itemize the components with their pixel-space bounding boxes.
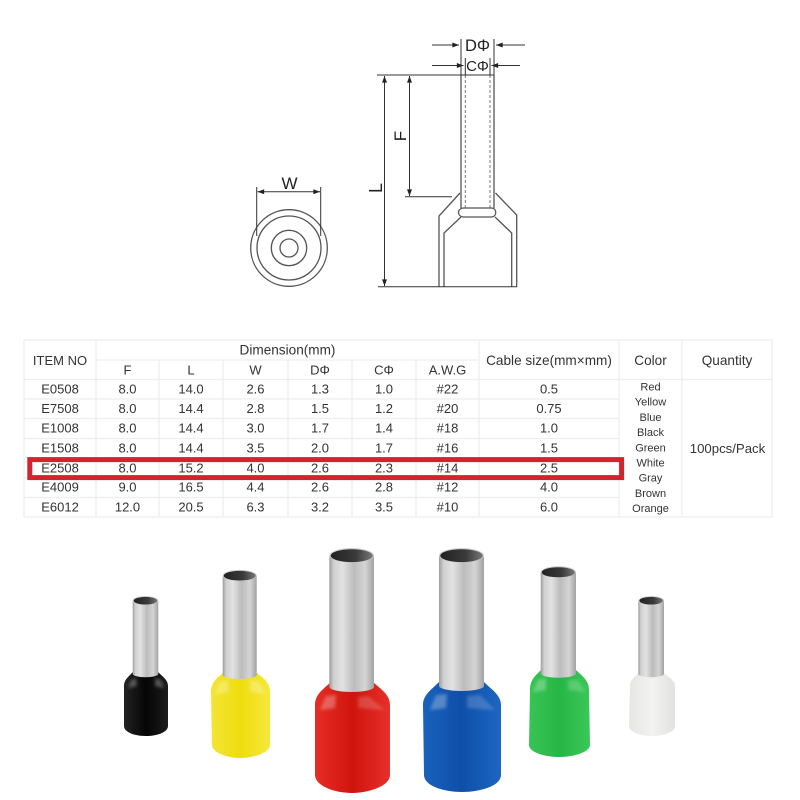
row E1008: 1.0 <box>540 420 558 436</box>
ferrule: red <box>315 548 390 793</box>
dimension: C phi <box>432 58 520 75</box>
side view: ferrule outline <box>439 75 517 287</box>
row E2508: #14 <box>437 460 458 476</box>
row E0508: 2.6 <box>246 382 265 396</box>
table header: A.W.G <box>429 362 466 378</box>
ferrule: black <box>124 596 168 736</box>
row E4009: 4.4 <box>246 480 265 494</box>
color list: Yellow <box>635 396 666 408</box>
row E0508: 1.0 <box>375 382 393 396</box>
color list: Orange <box>632 503 669 515</box>
table header: ITEM NO <box>33 353 87 368</box>
color list <box>632 382 669 515</box>
row E6012: 20.5 <box>178 500 204 514</box>
end view: ferrule circles with W dimension: W <box>281 174 298 193</box>
table header: Color <box>634 353 667 368</box>
row E2508: 8.0 <box>118 460 137 476</box>
row E4009: 2.8 <box>375 480 393 494</box>
row E1508: 8.0 <box>118 440 137 456</box>
row E4009: 4.0 <box>540 480 558 494</box>
row E1008: 1.7 <box>311 420 329 436</box>
row E1008: 1.4 <box>375 420 393 436</box>
row E7508: 1.5 <box>311 401 329 416</box>
color list: White <box>636 458 665 470</box>
row E0508: 0.5 <box>540 382 558 396</box>
row E4009: E4009 <box>41 480 79 494</box>
row E7508 <box>41 401 562 416</box>
dimension: L <box>366 75 517 287</box>
color list: Red <box>640 382 661 394</box>
row E0508: E0508 <box>41 382 79 396</box>
row E6012: #10 <box>437 500 458 514</box>
table grid <box>24 340 772 517</box>
row E6012: 6.3 <box>246 500 265 514</box>
row E1508: 1.5 <box>540 440 558 456</box>
row E1008 <box>41 420 558 436</box>
row E6012: E6012 <box>41 500 79 514</box>
quantity: 100pcs/Pack <box>690 441 766 456</box>
product photo: six ferrules <box>124 548 675 793</box>
table header: F <box>124 362 132 378</box>
row E7508: #20 <box>437 401 458 416</box>
row E1008: E1008 <box>41 420 79 436</box>
row E2508: E2508 <box>41 460 79 476</box>
row E2508: 2.3 <box>375 460 393 476</box>
row E1508: 3.5 <box>246 440 265 456</box>
row E6012: 3.5 <box>375 500 393 514</box>
row E1508: 1.7 <box>375 440 393 456</box>
row E2508 <box>41 460 558 476</box>
row E7508: 0.75 <box>536 401 562 416</box>
row E0508 <box>41 382 558 396</box>
color list: Brown <box>635 488 666 500</box>
color list: Blue <box>639 412 662 424</box>
row E6012: 12.0 <box>115 500 140 514</box>
row E1008: #18 <box>437 420 458 436</box>
table header: CΦ <box>374 362 394 378</box>
row E1508: 2.0 <box>311 440 329 456</box>
dimension: F <box>391 76 452 197</box>
row E6012 <box>41 500 558 514</box>
row E1508: E1508 <box>41 440 79 456</box>
row E2508: 2.5 <box>540 460 558 476</box>
row E4009: 16.5 <box>178 480 204 494</box>
dimension: D phi: DΦ <box>465 37 490 55</box>
row E0508: 1.3 <box>311 382 329 396</box>
row E1008: 14.4 <box>178 420 204 436</box>
row E1008: 8.0 <box>118 420 137 436</box>
row E7508: 14.4 <box>178 401 204 416</box>
end view: ferrule circles with W dimension <box>251 174 327 286</box>
table header: Quantity <box>702 353 753 368</box>
color list: Black <box>637 427 664 439</box>
dimension: L: L <box>366 183 386 193</box>
color list: Gray <box>639 472 663 484</box>
row E1008: 3.0 <box>246 420 265 436</box>
row E0508: #22 <box>437 382 458 396</box>
row E7508: E7508 <box>41 401 79 416</box>
table header: L <box>187 362 195 378</box>
row E6012: 3.2 <box>311 500 329 514</box>
red highlight box around E2508 row <box>30 460 622 478</box>
table header: Cable size(mm×mm) <box>486 353 612 368</box>
ferrule: white <box>629 596 675 736</box>
row E6012: 6.0 <box>540 500 558 514</box>
dimension: C phi: CΦ <box>466 58 489 75</box>
table header: W <box>249 362 262 378</box>
ferrule: blue <box>423 548 501 792</box>
row E4009: 9.0 <box>118 480 137 494</box>
color list: Green <box>635 442 666 454</box>
row E4009: #12 <box>437 480 458 494</box>
row E4009 <box>41 480 558 494</box>
dimension: D phi <box>432 37 525 75</box>
row E7508: 2.8 <box>246 401 265 416</box>
dimension: F: F <box>391 131 410 141</box>
row E1508: #16 <box>437 440 458 456</box>
table header: DΦ <box>310 362 330 378</box>
row E1508 <box>41 440 558 456</box>
ferrule: yellow <box>211 570 270 758</box>
row E4009: 2.6 <box>311 480 329 494</box>
technical drawing <box>251 37 525 287</box>
row E7508: 1.2 <box>375 401 393 416</box>
row E7508: 8.0 <box>118 401 137 416</box>
row E2508: 15.2 <box>178 460 204 476</box>
row E1508: 14.4 <box>178 440 204 456</box>
ferrule: green <box>529 566 590 757</box>
row E2508: 2.6 <box>311 460 329 476</box>
table header <box>33 342 753 378</box>
row E2508: 4.0 <box>246 460 265 476</box>
table header: Dimension(mm) <box>240 342 335 358</box>
row E0508: 8.0 <box>118 382 137 396</box>
specification table <box>24 340 772 517</box>
row E0508: 14.0 <box>178 382 204 396</box>
